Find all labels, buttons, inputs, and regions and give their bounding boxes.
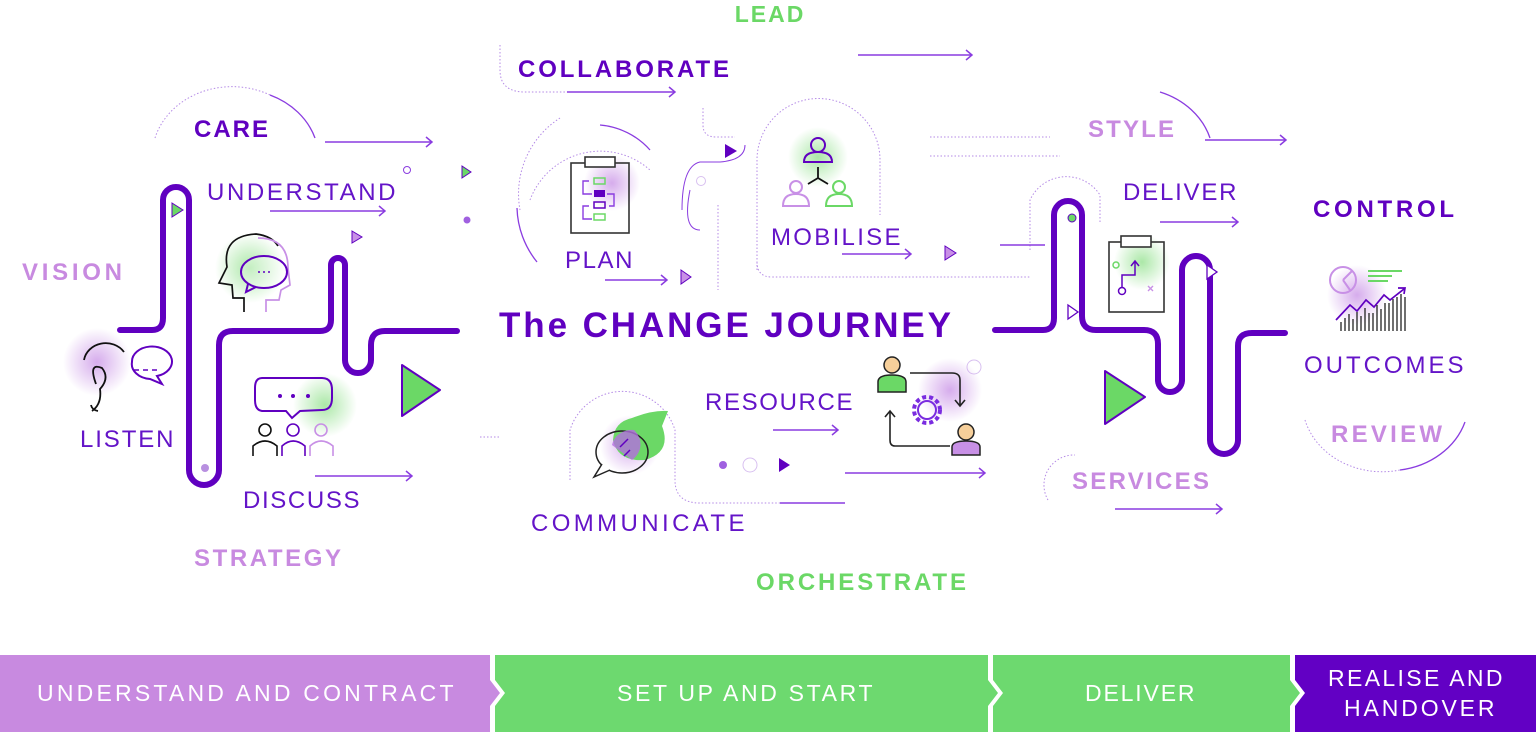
label: STYLE: STYLE <box>1088 116 1176 143</box>
icon: deliver clipboard <box>1109 234 1170 312</box>
label: REVIEW: REVIEW <box>1331 421 1444 448</box>
label: STRATEGY: STRATEGY <box>194 545 343 572</box>
heading: care arc <box>270 95 315 138</box>
icon: communicate bubbles <box>594 411 668 477</box>
phase: realise and handover: HANDOVER <box>1344 695 1497 721</box>
label: CONTROL: CONTROL <box>1313 196 1456 223</box>
label: RESOURCE: RESOURCE <box>705 389 855 416</box>
icon: discuss group <box>253 373 357 456</box>
label: LISTEN: LISTEN <box>80 426 176 453</box>
icon: listen <box>63 328 172 411</box>
phase bar <box>0 655 1536 732</box>
phase: set up and start: SET UP AND START <box>617 680 875 706</box>
icon: mobilise people <box>783 127 852 206</box>
phase: deliver: DELIVER <box>1085 680 1197 706</box>
label: UNDERSTAND: UNDERSTAND <box>207 179 398 206</box>
phase: understand and contract: UNDERSTAND AND CONTRACT <box>37 680 456 706</box>
label: LEAD: LEAD <box>735 1 805 27</box>
label: CARE: CARE <box>194 116 270 143</box>
icon: outcomes chart <box>1327 265 1405 331</box>
label: DISCUSS: DISCUSS <box>243 487 362 514</box>
label: PLAN: PLAN <box>565 247 635 274</box>
journey path left <box>120 187 457 485</box>
journey path right <box>995 201 1285 454</box>
label: SERVICES: SERVICES <box>1072 468 1211 495</box>
icon: plan clipboard <box>571 155 640 233</box>
phase: realise and handover <box>1295 655 1536 732</box>
play markers <box>172 144 1217 472</box>
label: MOBILISE: MOBILISE <box>771 224 903 251</box>
icon: resource gear <box>878 357 982 455</box>
arrows <box>270 50 1286 514</box>
label: VISION: VISION <box>22 259 124 286</box>
label: COLLABORATE: COLLABORATE <box>518 56 731 83</box>
icon: understand heads <box>215 233 290 312</box>
decorative dotted arcs <box>155 45 1400 503</box>
label: DELIVER: DELIVER <box>1123 179 1239 206</box>
title: The CHANGE JOURNEY <box>499 306 953 345</box>
phase: understand and contract <box>0 655 500 732</box>
phase: realise and handover: REALISE AND <box>1328 665 1505 691</box>
phase: set up and start <box>495 655 998 732</box>
label: ORCHESTRATE: ORCHESTRATE <box>756 569 968 596</box>
label: OUTCOMES: OUTCOMES <box>1304 352 1466 379</box>
label: COMMUNICATE: COMMUNICATE <box>531 510 747 537</box>
phase: deliver <box>993 655 1300 732</box>
